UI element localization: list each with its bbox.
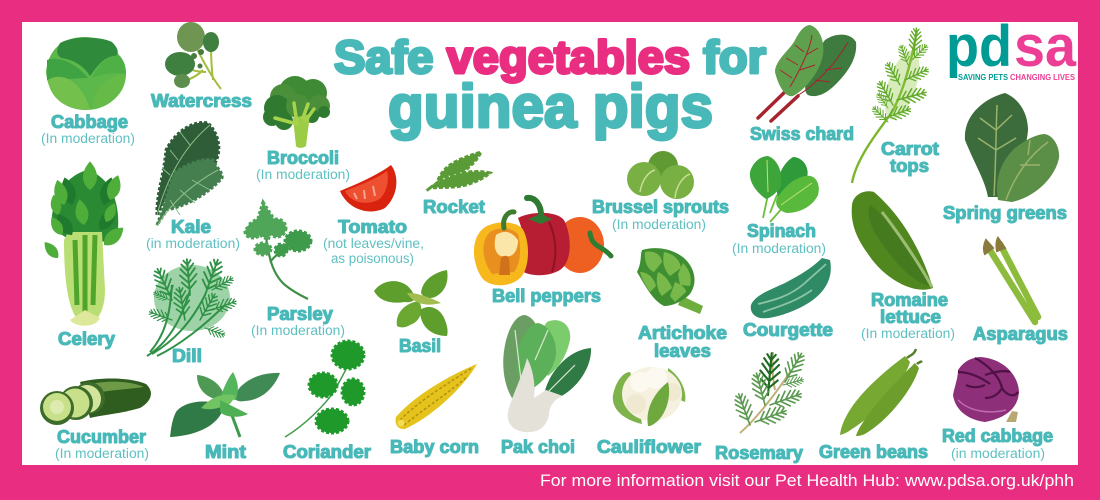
label: carrot tops: tops bbox=[890, 156, 929, 176]
label: spinach: Spinach bbox=[747, 221, 816, 241]
label: watercress: Watercress bbox=[151, 91, 252, 111]
label: kale: (in moderation) bbox=[146, 236, 240, 251]
label: red cabbage bbox=[942, 426, 1053, 461]
icon: parsley bbox=[245, 202, 311, 299]
label: tomato: (not leaves/vine, bbox=[323, 236, 424, 251]
logo: PDSA bbox=[946, 14, 1077, 82]
label: broccoli: Broccoli bbox=[267, 148, 339, 168]
label: cucumber: Cucumber bbox=[57, 427, 146, 447]
label: romaine lettuce bbox=[861, 290, 955, 341]
title bbox=[334, 31, 766, 140]
icon: dill bbox=[147, 257, 238, 356]
label: dill: Dill bbox=[172, 346, 202, 366]
label: romaine lettuce: lettuce bbox=[880, 307, 941, 327]
label: celery: Celery bbox=[58, 329, 115, 349]
label: red cabbage: Red cabbage bbox=[942, 426, 1053, 446]
label: cabbage: Cabbage bbox=[51, 112, 128, 132]
label: coriander: Coriander bbox=[283, 442, 371, 462]
icon: cauliflower bbox=[613, 367, 685, 426]
label: baby corn: Baby corn bbox=[390, 437, 479, 457]
label: spinach bbox=[732, 221, 826, 256]
label: parsley bbox=[251, 304, 345, 338]
icon: baby corn bbox=[395, 364, 477, 429]
label: red cabbage: (in moderation) bbox=[951, 446, 1045, 461]
icon: cabbage bbox=[46, 37, 126, 110]
label: rosemary: Rosemary bbox=[715, 443, 803, 463]
icon: brussel sprouts bbox=[627, 151, 694, 199]
label: courgette: Courgette bbox=[743, 320, 833, 340]
label: rocket: Rocket bbox=[423, 197, 485, 217]
icon: coriander bbox=[285, 341, 364, 437]
label: tomato: as poisonous) bbox=[331, 251, 414, 266]
label: asparagus: Asparagus bbox=[973, 324, 1068, 344]
label: brussel sprouts bbox=[592, 197, 729, 232]
label: cauliflower: Cauliflower bbox=[597, 437, 701, 457]
label: artichoke leaves: leaves bbox=[654, 341, 711, 361]
icon: watercress bbox=[165, 22, 221, 89]
label: broccoli: (In moderation) bbox=[256, 167, 350, 182]
icon: rosemary bbox=[731, 350, 808, 433]
icon: artichoke bbox=[637, 248, 703, 314]
label: spring greens: Spring greens bbox=[943, 203, 1067, 223]
label: tomato bbox=[323, 217, 424, 266]
label: spinach: (In moderation) bbox=[732, 241, 826, 256]
label: cabbage: (In moderation) bbox=[41, 131, 135, 146]
icon: mint bbox=[170, 372, 280, 437]
icon: broccoli bbox=[263, 76, 330, 148]
icon: basil bbox=[374, 270, 448, 336]
logo: PDSA: sa bbox=[1014, 14, 1077, 79]
icon: romaine lettuce bbox=[852, 191, 933, 290]
label: artichoke leaves bbox=[638, 323, 727, 361]
icon: pak choi bbox=[503, 315, 591, 432]
icon: swiss chard bbox=[758, 25, 856, 121]
label: carrot tops: Carrot bbox=[881, 139, 939, 159]
logo: PDSA: CHANGING LIVES bbox=[1010, 73, 1076, 82]
label: romaine lettuce: Romaine bbox=[871, 290, 948, 310]
label: tomato: Tomato bbox=[338, 217, 407, 237]
icon: bell peppers bbox=[474, 198, 611, 285]
label: parsley: Parsley bbox=[267, 304, 333, 324]
label: artichoke leaves: Artichoke bbox=[638, 323, 727, 343]
label: mint: Mint bbox=[205, 442, 246, 462]
title: Safe vegetables for bbox=[334, 31, 766, 83]
label: kale: Kale bbox=[171, 217, 211, 237]
label: kale bbox=[146, 217, 240, 251]
icon: green beans bbox=[840, 349, 922, 436]
icon: tomato bbox=[340, 165, 396, 211]
icon: rocket bbox=[427, 152, 490, 191]
logo: PDSA: pd bbox=[946, 14, 1012, 79]
icon: kale bbox=[157, 122, 222, 226]
icon: carrot tops bbox=[852, 28, 931, 183]
label: bell peppers: Bell peppers bbox=[492, 286, 601, 306]
icon: spring greens bbox=[965, 93, 1059, 202]
label: cabbage bbox=[41, 112, 135, 146]
icon: red cabbage bbox=[953, 357, 1019, 422]
logo: PDSA: SAVING PETS bbox=[958, 73, 1009, 82]
label: romaine lettuce: (In moderation) bbox=[861, 326, 955, 341]
label: basil: Basil bbox=[399, 336, 441, 356]
label: green beans: Green beans bbox=[819, 442, 928, 462]
title: guinea pigs bbox=[388, 73, 713, 140]
icon: spinach bbox=[750, 156, 819, 222]
icon: celery bbox=[41, 161, 128, 326]
footer text: For more information visit our Pet Health Hub: www.pdsa.org.uk/phh bbox=[540, 471, 1074, 490]
label: swiss chard: Swiss chard bbox=[750, 124, 854, 144]
label: parsley: (In moderation) bbox=[251, 323, 345, 338]
label: cucumber bbox=[55, 427, 149, 461]
icon: asparagus bbox=[984, 238, 1038, 322]
label: brussel sprouts: (In moderation) bbox=[612, 217, 706, 232]
label: broccoli bbox=[256, 148, 350, 182]
label: pak choi: Pak choi bbox=[501, 437, 575, 457]
icon: courgette bbox=[751, 258, 831, 318]
label: brussel sprouts: Brussel sprouts bbox=[592, 197, 729, 217]
label: carrot tops bbox=[881, 139, 939, 176]
icon: cucumber bbox=[40, 378, 151, 425]
label: cucumber: (In moderation) bbox=[55, 446, 149, 461]
